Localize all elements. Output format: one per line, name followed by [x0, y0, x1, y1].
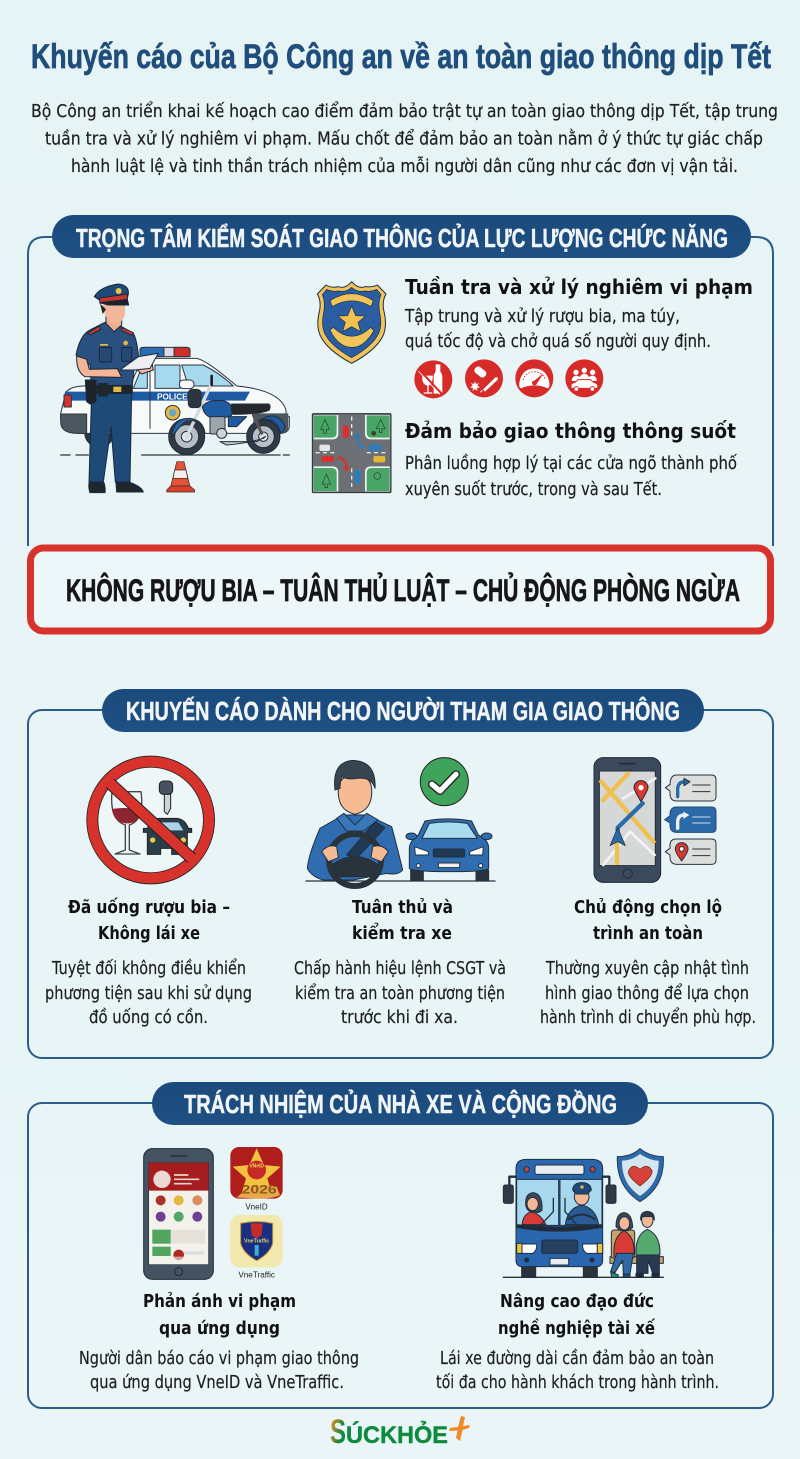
traffic cone	[167, 462, 195, 492]
icon: overloaded	[565, 359, 603, 397]
phone	[144, 1149, 213, 1279]
heading: responsibility: TRÁCH NHIỆM CỦA NHÀ XE VÀ CỘNG ĐỒNG	[184, 1088, 617, 1119]
direction card 1	[665, 775, 716, 801]
app icon: VneTraffic: VneTraffic	[244, 1239, 269, 1245]
text: patrol description: quá tốc độ và chở quá số người quy định.	[405, 331, 711, 352]
text: obey and check vehicle: kiểm tra an toàn phương tiện	[295, 983, 505, 1004]
label: VneTraffic: VneTraffic	[238, 1270, 275, 1279]
icon: driver with seat belt and car	[306, 758, 495, 886]
text: driver ethics: tối đa cho hành khách trong hành trình.	[436, 1372, 719, 1393]
seated passengers	[610, 1211, 663, 1277]
check mark	[420, 758, 468, 806]
text: choose safe route: Chủ động chọn lộ	[574, 897, 722, 918]
text: no drink driving: Không lái xe	[98, 923, 200, 944]
text: obey and check vehicle: trước khi đi xa.	[341, 1008, 458, 1028]
heading: responsibility	[152, 1082, 648, 1125]
illustration: police officer, car and motorbike	[61, 284, 289, 493]
icon: no drugs	[465, 359, 503, 397]
text: smooth traffic description: xuyên suốt trước, trong và sau Tết.	[405, 479, 662, 500]
slogan box	[30, 548, 770, 631]
text: patrol description	[404, 307, 711, 352]
text: obey and check vehicle: Tuân thủ và	[352, 897, 453, 918]
text: driver ethics: Lái xe đường dài cần đảm bảo an toàn	[440, 1348, 714, 1369]
text: driver ethics: nghề nghiệp tài xế	[498, 1318, 656, 1339]
logo: Sức Khỏe+: ÚCKHỎE	[346, 1420, 448, 1449]
text: smooth traffic description: Phân luồng hợp lý tại các cửa ngõ thành phố	[405, 453, 737, 474]
text: choose safe route: trình an toàn	[593, 923, 703, 944]
text: report via app	[79, 1291, 359, 1393]
text: choose safe route	[540, 897, 756, 1028]
driver	[307, 760, 403, 886]
app icon: VneID	[230, 1147, 283, 1199]
ground line	[61, 453, 289, 457]
intro text	[31, 101, 778, 177]
direction card 2	[665, 807, 716, 832]
app icon: VneID: 2026	[242, 1182, 277, 1196]
panel: responsibility of operators and community	[28, 1082, 773, 1408]
text: obey and check vehicle: kiểm tra xe	[352, 922, 452, 944]
text: no drink driving: phương tiện sau khi sử dụng	[45, 984, 252, 1004]
text: choose safe route: hình giao thông để lựa chọn	[545, 983, 749, 1004]
icon: reporting phone and apps	[144, 1147, 283, 1279]
text: report via app: qua ứng dụng	[159, 1318, 280, 1339]
app icon: VneID: VNeID	[249, 1163, 264, 1169]
heading: recommendations	[102, 689, 704, 732]
text: report via app: Người dân báo cáo vi phạm giao thông	[79, 1349, 359, 1369]
icon: police badge	[317, 282, 386, 363]
logo: Sức Khỏe+: S	[330, 1413, 346, 1451]
text: no drink driving	[45, 897, 252, 1028]
bus	[503, 1159, 616, 1277]
text: choose safe route: Thường xuyên cập nhật tình	[545, 959, 749, 979]
icon: navigation phone	[594, 758, 716, 882]
motorbike	[169, 376, 285, 455]
car label: POLICE	[157, 392, 188, 401]
panel: recommendations for road users	[28, 689, 773, 1058]
text: smooth traffic description	[405, 453, 737, 500]
police car	[61, 347, 289, 447]
text: no drink driving: đồ uống có cồn.	[89, 1007, 208, 1028]
text: no drink driving: Tuyệt đối không điều khiển	[51, 958, 246, 979]
text: choose safe route: hành trình di chuyển phù hợp.	[540, 1007, 756, 1028]
icon: bus, driver, passengers, shield	[503, 1149, 663, 1277]
sub-heading: patrol: Tuần tra và xử lý nghiêm vi phạm	[405, 275, 753, 299]
icons: violation types	[414, 359, 603, 398]
text: obey and check vehicle: Chấp hành hiệu lệnh CSGT và	[294, 958, 506, 979]
icon: speeding	[515, 359, 553, 397]
officer	[76, 284, 158, 493]
shield with heart	[617, 1149, 663, 1202]
text: driver ethics	[436, 1291, 719, 1393]
text: report via app: qua ứng dụng VneID và VneTraffic.	[90, 1373, 344, 1393]
icon: intersection	[312, 414, 391, 493]
text: driver ethics: Nâng cao đạo đức	[500, 1291, 654, 1312]
heading: traffic control focus	[52, 215, 751, 258]
text: report via app: Phản ánh vi phạm	[143, 1291, 296, 1312]
text: no drink driving: Đã uống rượu bia –	[68, 897, 230, 918]
text: patrol description: Tập trung và xử lý rượu bia, ma túy,	[404, 307, 680, 327]
icon: no alcohol	[414, 360, 452, 398]
car	[406, 819, 492, 881]
sub-heading: smooth traffic: Đảm bảo giao thông thông suốt	[405, 419, 736, 443]
text: obey and check vehicle	[294, 897, 506, 1028]
panel: traffic control focus	[28, 215, 773, 546]
intro text: hành luật lệ và tinh thần trách nhiệm của mỗi người dân cũng như các đơn vị vận tải.	[71, 156, 738, 177]
logo: Sức Khỏe+	[330, 1413, 470, 1451]
direction card 3	[665, 839, 716, 864]
label: VneID: VneID	[245, 1202, 268, 1211]
icon: no drink driving	[92, 761, 209, 879]
